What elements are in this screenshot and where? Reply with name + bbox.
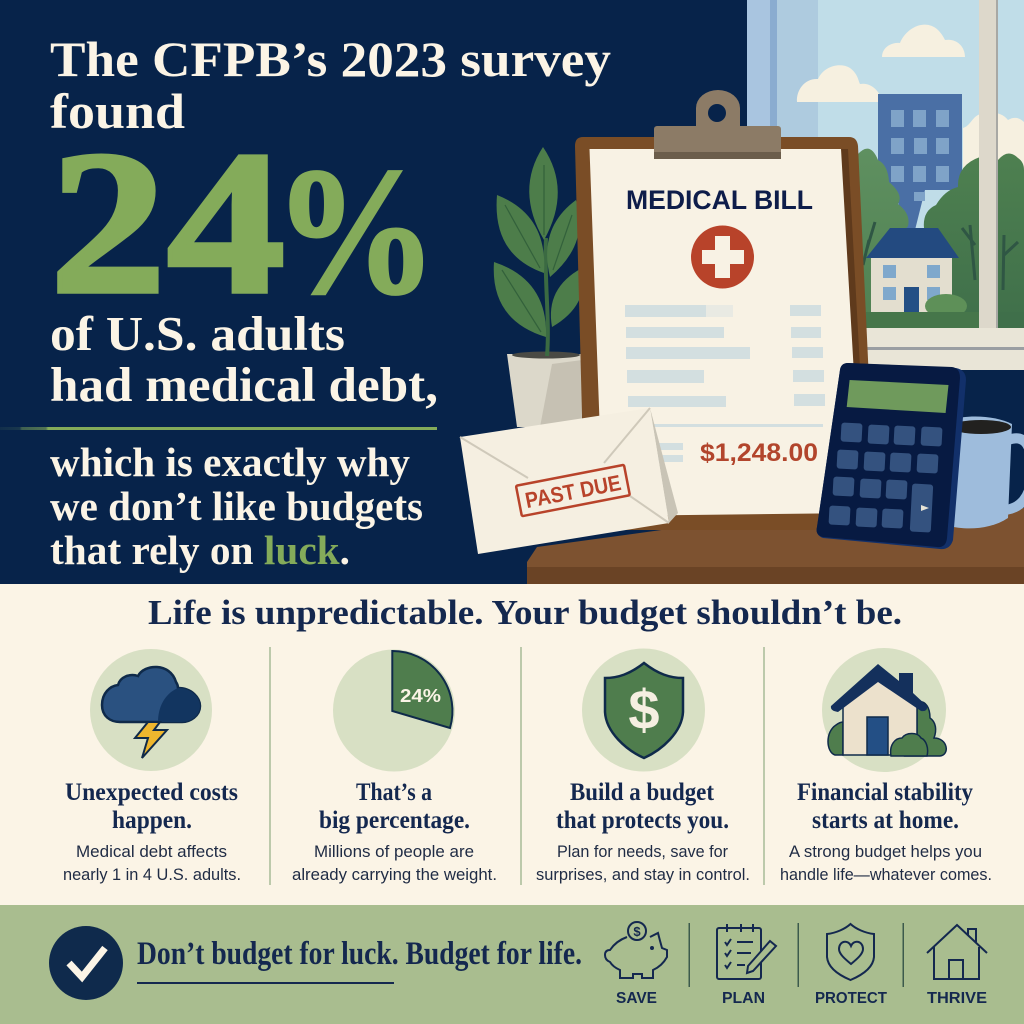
calculator screen — [847, 380, 948, 413]
hero headline: of U.S. adults — [50, 306, 345, 361]
icon: protect shield: PROTECT — [815, 990, 888, 1007]
panel: footer band — [0, 905, 1024, 1024]
column: financial stability — [780, 648, 992, 884]
column: unexpected costs: nearly 1 in 4 U.S. adults. — [63, 866, 241, 884]
line items — [625, 305, 825, 462]
icon: protect shield — [815, 924, 888, 1007]
column: unexpected costs: Medical debt affects — [76, 843, 227, 861]
column: big percentage: big percentage. — [319, 807, 470, 834]
bill paper — [590, 149, 862, 516]
clipboard clip — [654, 90, 781, 159]
icon: storm cloud — [90, 649, 212, 771]
icon: red cross — [691, 226, 754, 288]
icon: potted plant — [494, 147, 583, 427]
column: big percentage: Millions of people are — [314, 843, 474, 861]
column: protective budget — [536, 648, 750, 884]
illustration: medical bill clipboard — [575, 90, 876, 530]
icon: home with bushes — [822, 648, 946, 772]
column: big percentage — [292, 650, 497, 884]
icon: calculator — [817, 363, 966, 549]
big statistic: % — [274, 132, 437, 332]
column: protective budget: Plan for needs, save for — [557, 843, 728, 861]
column: unexpected costs: happen. — [112, 807, 192, 834]
column: protective budget: surprises, and stay in control. — [536, 866, 750, 884]
house in the window — [866, 228, 959, 312]
illustration: past due envelope — [460, 408, 678, 554]
icon: thrive house — [927, 925, 987, 1007]
icon: plan checklist — [717, 924, 776, 1007]
column: big percentage: That’s a — [356, 779, 432, 806]
past due stamp: PAST DUE — [523, 470, 623, 513]
column: protective budget: that protects you. — [556, 807, 729, 834]
big statistic: 2 — [50, 110, 166, 336]
icon: save piggy bank — [605, 922, 667, 1007]
bill amount: $1,248.00 — [700, 439, 818, 467]
hero headline: we don’t like budgets — [50, 483, 423, 529]
icon: check badge — [49, 926, 123, 1000]
hero headline: that rely on luck. — [50, 527, 350, 573]
calculator keys — [829, 422, 943, 533]
hero headline: found — [50, 83, 185, 139]
column: protective budget: Build a budget — [570, 779, 715, 806]
hero headline — [0, 31, 611, 573]
column: financial stability: handle life—whatever comes. — [780, 866, 992, 884]
icon: shield with dollar: $ — [628, 678, 660, 741]
icon: save piggy bank: $ — [633, 924, 641, 939]
tagline: Don’t budget for luck. Budget for life. — [137, 936, 582, 972]
column: unexpected costs — [63, 649, 241, 884]
panel: four messages — [0, 584, 1024, 906]
big statistic — [50, 110, 437, 336]
icon: save piggy bank: SAVE — [616, 990, 657, 1007]
column: unexpected costs: Unexpected costs — [65, 779, 238, 806]
window frame — [840, 0, 1024, 370]
big statistic: 4 — [167, 110, 285, 336]
icon: clouds — [797, 25, 1024, 172]
column: financial stability: Financial stability — [797, 779, 973, 806]
pot — [507, 352, 582, 427]
pie chart: 24 percent: 24% — [400, 686, 441, 706]
section heading: Life is unpredictable. Your budget shouldn’t be. — [148, 593, 902, 632]
building — [878, 94, 962, 230]
column: financial stability: A strong budget helps you — [789, 843, 982, 861]
hero headline: had medical debt, — [50, 357, 438, 412]
icon: plan checklist: PLAN — [722, 990, 765, 1007]
column: financial stability: starts at home. — [812, 807, 959, 834]
bushes — [925, 294, 967, 312]
illustration: window view — [747, 0, 1024, 330]
panel: hero background — [0, 0, 1024, 584]
icon: thrive house: THRIVE — [927, 990, 987, 1007]
hero headline: which is exactly why — [50, 439, 411, 485]
leaves — [494, 147, 583, 337]
icon: coffee mug — [949, 417, 1024, 528]
bill title: MEDICAL BILL — [626, 185, 813, 215]
desk — [527, 508, 1024, 584]
column: big percentage: already carrying the weight. — [292, 866, 497, 884]
hero headline: The CFPB’s 2023 survey — [50, 31, 611, 87]
trees — [857, 149, 1024, 330]
pie chart: 24 percent — [333, 650, 455, 772]
clipboard board — [575, 137, 876, 530]
icon: shield with dollar — [582, 648, 705, 772]
